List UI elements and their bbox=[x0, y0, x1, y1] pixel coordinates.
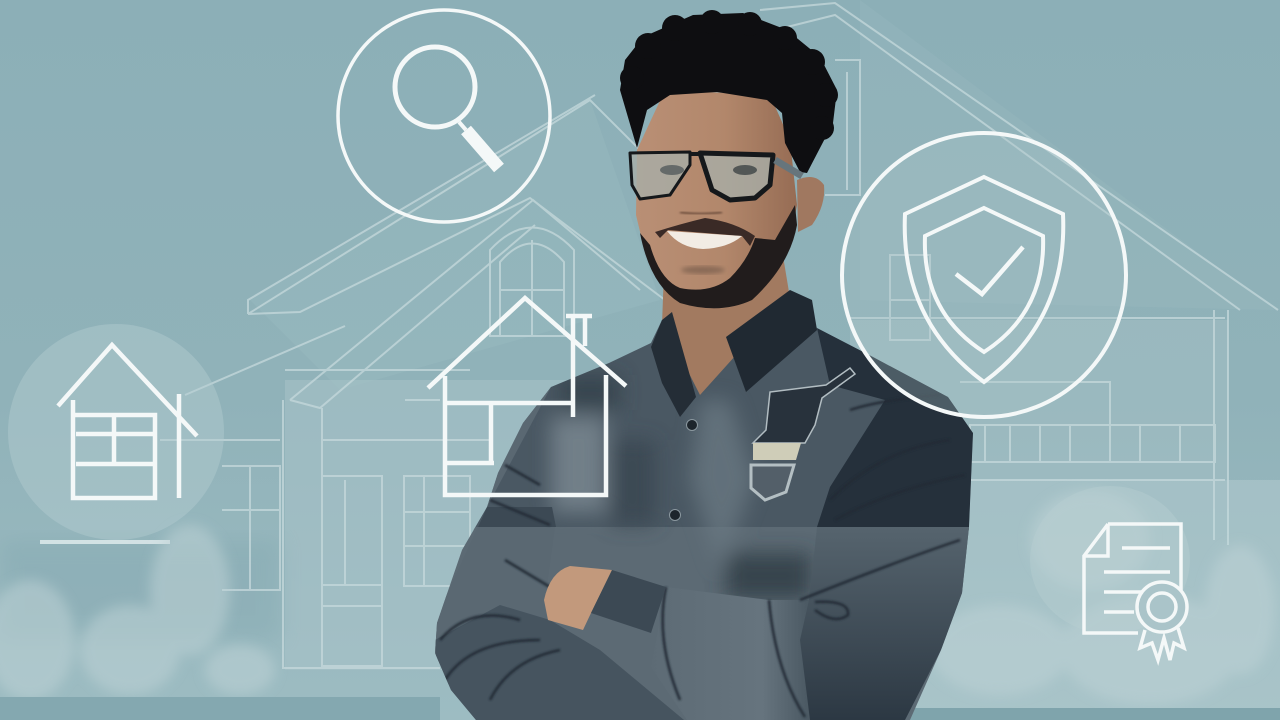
forearm across chest bbox=[708, 592, 810, 720]
neck bbox=[662, 250, 790, 398]
icon: house outline, center bbox=[428, 298, 626, 495]
viewer-right lower sleeve bbox=[800, 528, 969, 720]
nose shadow bbox=[680, 212, 722, 214]
shirt body bbox=[435, 320, 973, 720]
head bbox=[636, 90, 797, 309]
ear bbox=[797, 177, 824, 232]
harness strap bbox=[751, 368, 855, 500]
icon: shield in circle bbox=[842, 133, 1126, 417]
chest shading bbox=[551, 375, 811, 599]
placket and buttons bbox=[670, 420, 698, 520]
icon: magnifying glass in circle bbox=[338, 10, 550, 222]
icon: document with seal bbox=[1030, 486, 1190, 660]
hair bbox=[620, 10, 838, 173]
viewer-left forearm bbox=[435, 605, 690, 720]
shrubs bbox=[0, 490, 1275, 705]
beard bbox=[640, 205, 797, 308]
collar bbox=[651, 312, 696, 417]
fabric folds bbox=[440, 395, 965, 717]
person bbox=[420, 10, 990, 720]
icon: house in pale circle, left bbox=[8, 324, 224, 540]
shirt cuff bbox=[591, 570, 666, 633]
viewer-left sleeve bbox=[435, 387, 555, 690]
ground band bbox=[0, 697, 1280, 720]
glasses bbox=[630, 152, 802, 200]
hand bbox=[544, 566, 612, 630]
viewer-right upper sleeve: dark top bbox=[817, 328, 973, 527]
